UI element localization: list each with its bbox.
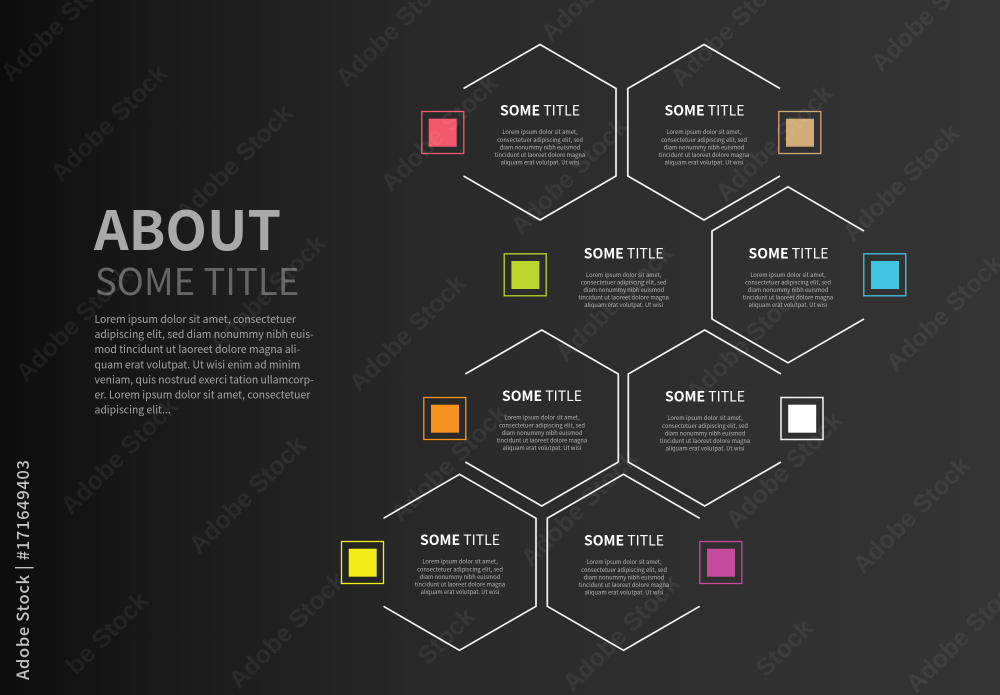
intro text block: veniam, quis nostrud exerci tation ullamcorp-: [94, 371, 314, 386]
item text: consectetuer adipiscing elit, sed: [661, 135, 747, 144]
item text: aliquam erat volutpat. Ut wisi: [501, 158, 580, 167]
watermark pattern: Adobe Stock: [45, 59, 173, 187]
item text: Lorem ipsum dolor sit amet,: [422, 557, 498, 566]
item text: Lorem ipsum dolor sit amet,: [666, 127, 742, 136]
watermark pattern: Adobe Stock: [680, 279, 808, 407]
item title: SOME TITLE: [665, 100, 744, 120]
item text: diam nonummy nibh euismod: [748, 285, 829, 294]
item title: SOME TITLE: [502, 386, 582, 406]
item title: SOME TITLE: [584, 243, 664, 263]
watermark pattern: be Stock: [61, 587, 154, 680]
item text: diam nonummy nibh euismod: [420, 572, 501, 581]
intro text block: mod tincidunt ut laoreet dolore magna ali-: [94, 341, 300, 356]
hexagon outline: [464, 44, 616, 220]
intro text block: adipiscing elit, sed diam nonummy nibh euis-: [94, 326, 314, 341]
icon: yellow square: [342, 542, 384, 584]
watermark pattern: Adobe Stock: [847, 451, 975, 579]
item text: aliquam erat volutpat. Ut wisi: [421, 587, 500, 596]
watermark pattern: Stock: [412, 602, 480, 670]
item text: consectetuer adipiscing elit, sed: [662, 421, 748, 430]
hexagon outline: [465, 330, 618, 506]
panel: yellow hexagon: [342, 474, 536, 650]
watermark pattern: Adobe Stock: [550, 239, 678, 367]
panel: magenta hexagon: [547, 474, 742, 650]
stock id label: Adobe Stock | #171649403: [10, 460, 34, 680]
item text: diam nonummy nibh euismod: [664, 142, 745, 151]
panel: green item: [504, 243, 669, 309]
item text: aliquam erat volutpat. Ut wisi: [584, 300, 663, 309]
item text: aliquam erat volutpat. Ut wisi: [503, 443, 582, 452]
item title: SOME TITLE: [500, 100, 580, 120]
watermark pattern: Adobe Stock: [557, 569, 685, 695]
item title: SOME TITLE: [749, 243, 828, 263]
item text: diam nonummy nibh euismod: [665, 428, 746, 437]
panel: orange hexagon: [424, 330, 618, 506]
item text: aliquam erat volutpat. Ut wisi: [666, 444, 745, 453]
item text: diam nonummy nibh euismod: [500, 142, 581, 151]
item text: Lorem ipsum dolor sit amet,: [586, 270, 662, 279]
item text: diam nonummy nibh euismod: [584, 572, 665, 581]
watermark pattern: Adobe Stock: [720, 406, 848, 534]
item text: tincidunt ut laoreet dolore magna: [497, 436, 587, 444]
item text: consectetuer adipiscing elit, sed: [417, 564, 503, 573]
item title: SOME TITLE: [665, 386, 745, 406]
panel: blue hexagon: [712, 187, 906, 363]
icon: magenta square: [700, 542, 742, 584]
watermark pattern: Adobe Stock: [170, 99, 298, 227]
hexagon outline: [712, 187, 864, 363]
intro text block: adipiscing elit...: [94, 402, 171, 417]
item text: Lorem ipsum dolor sit amet,: [586, 557, 662, 566]
icon: tan square: [779, 112, 821, 154]
icon: red square: [422, 112, 464, 154]
hexagon outline: [628, 330, 781, 506]
item text: tincidunt ut laoreet dolore magna: [579, 293, 669, 302]
watermark pattern: Adobe Stock: [343, 269, 471, 397]
icon: orange square: [424, 398, 466, 440]
watermark pattern: Stock: [750, 614, 818, 682]
intro text block: er. Lorem ipsum dolor sit amet, consectetuer: [94, 386, 311, 402]
panel: tan hexagon: [628, 44, 821, 220]
watermark pattern: Adobe Stock: [385, 399, 513, 527]
intro text block: quam erat volutpat. Ut wisi enim ad minim: [94, 356, 300, 371]
watermark pattern: Adobe Stock: [515, 444, 643, 572]
heading: about: ABOUT: [93, 187, 281, 266]
item text: Lorem ipsum dolor sit amet,: [667, 413, 743, 422]
watermark pattern: Adobe Stock: [710, 79, 838, 207]
item text: Lorem ipsum dolor sit amet,: [504, 413, 580, 422]
watermark pattern: Adobe Stock: [55, 392, 183, 520]
watermark pattern: Adobe Stock: [223, 566, 351, 694]
item text: aliquam erat volutpat. Ut wisi: [749, 300, 828, 309]
watermark pattern: Adobe Stock: [203, 229, 331, 357]
watermark pattern: Adobe Stock: [375, 69, 503, 197]
hexagon outline: [384, 474, 536, 650]
item text: consectetuer adipiscing elit, sed: [499, 420, 585, 429]
icon: green square: [504, 254, 546, 296]
item text: tincidunt ut laoreet dolore magna: [660, 436, 750, 445]
watermark pattern: Adobe Stock: [505, 112, 633, 240]
hexagon outline: [547, 474, 700, 650]
item text: Lorem ipsum dolor sit amet,: [750, 270, 826, 279]
item text: aliquam erat volutpat. Ut wisi: [665, 158, 744, 167]
watermark pattern: Adobe Stock: [837, 119, 965, 247]
item text: consectetuer adipiscing elit, sed: [745, 277, 831, 286]
item text: aliquam erat volutpat. Ut wisi: [585, 588, 664, 597]
item text: tincidunt ut laoreet dolore magna: [659, 150, 749, 159]
hexagon outline: [628, 44, 780, 220]
item text: tincidunt ut laoreet dolore magna: [579, 580, 669, 589]
intro text block: Lorem ipsum dolor sit amet, consectetuer: [94, 311, 297, 326]
icon: white square: [781, 398, 823, 440]
item text: diam nonummy nibh euismod: [583, 285, 664, 294]
item text: tincidunt ut laoreet dolore magna: [495, 150, 585, 159]
panel: red hexagon: [422, 44, 616, 220]
item text: consectetuer adipiscing elit, sed: [497, 135, 583, 144]
watermark pattern: Adobe Stock: [183, 431, 311, 559]
item title: SOME TITLE: [584, 530, 664, 550]
item text: tincidunt ut laoreet dolore magna: [415, 580, 505, 588]
heading: some title: SOME TITLE: [95, 253, 299, 306]
item text: Lorem ipsum dolor sit amet,: [502, 127, 578, 136]
item text: consectetuer adipiscing elit, sed: [581, 277, 667, 286]
item text: diam nonummy nibh euismod: [502, 428, 583, 437]
icon: blue square: [864, 254, 906, 296]
item title: SOME TITLE: [420, 530, 500, 550]
item text: tincidunt ut laoreet dolore magna: [743, 293, 833, 302]
watermark pattern: Adobe Stock: [10, 259, 138, 387]
item text: consectetuer adipiscing elit, sed: [581, 565, 667, 574]
panel: white hexagon: [628, 330, 823, 506]
